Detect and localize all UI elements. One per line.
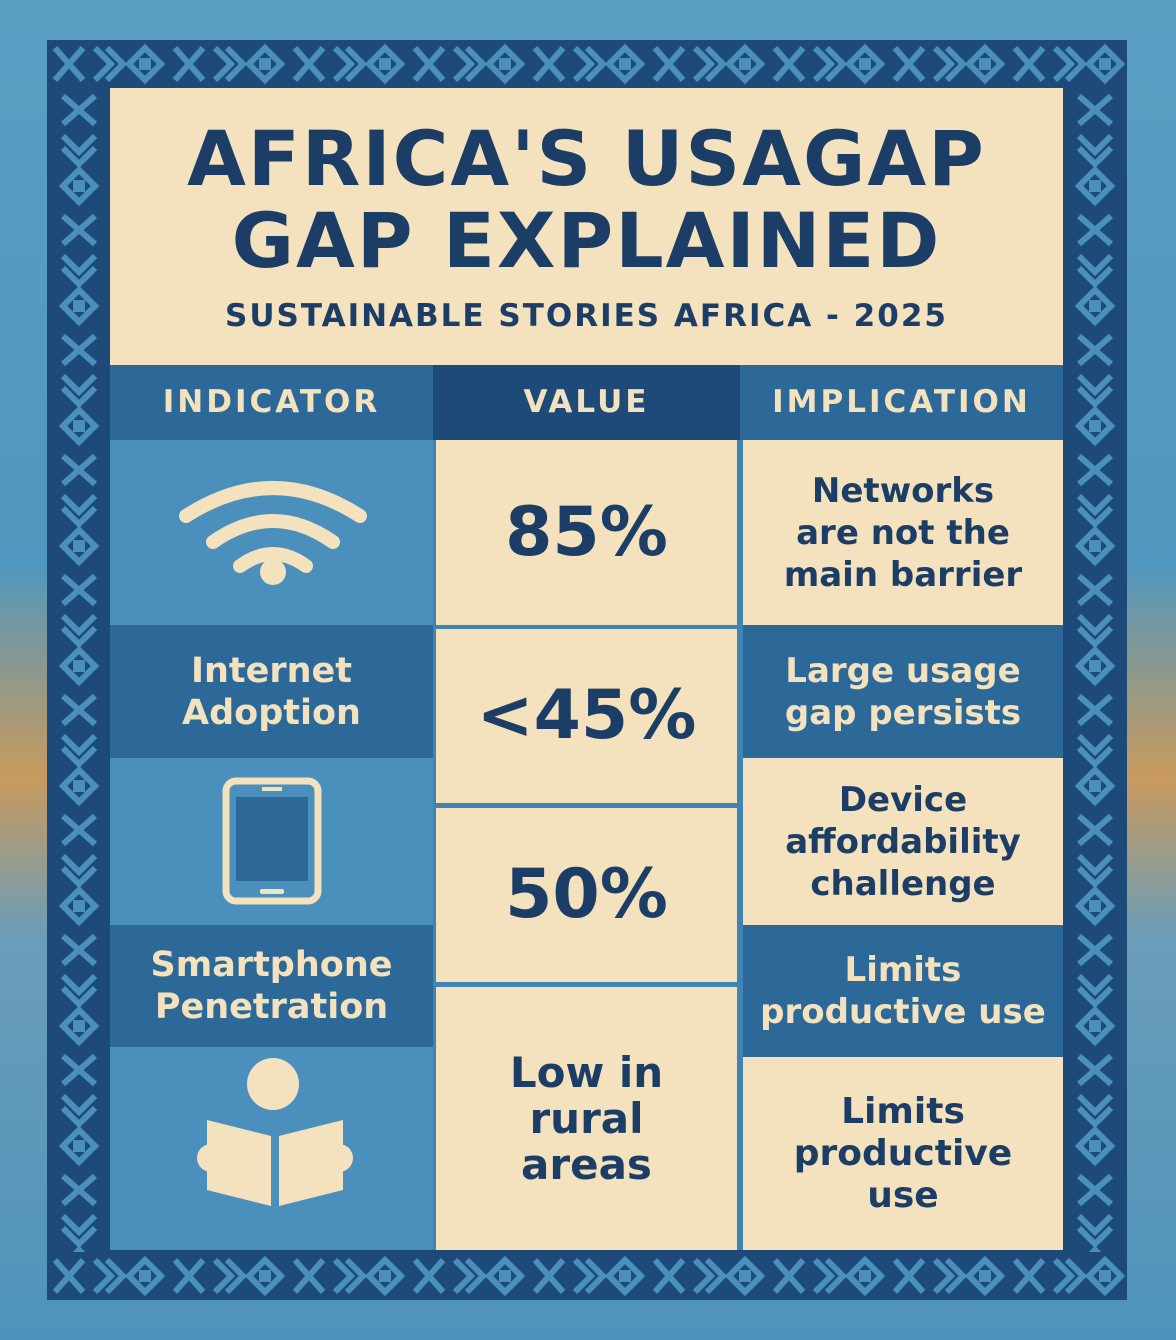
value 85%: 85% xyxy=(505,493,668,572)
implication column xyxy=(740,440,1063,1250)
header: indicator xyxy=(110,365,433,440)
label: smartphone penetration xyxy=(110,925,433,1047)
icon: reader xyxy=(197,1058,353,1206)
value 85% xyxy=(436,440,737,625)
label: internet adoption xyxy=(110,625,433,758)
implication: device affordability: Device xyxy=(839,780,967,820)
implication: large usage gap xyxy=(743,625,1063,758)
value 50% xyxy=(436,808,737,982)
value <45% xyxy=(436,629,737,803)
value low in rural areas: areas xyxy=(521,1140,652,1188)
implication: limits productive use 2: productive xyxy=(794,1132,1012,1174)
title xyxy=(187,114,986,285)
value low in rural areas: rural xyxy=(529,1094,644,1142)
header: indicator: INDICATOR xyxy=(163,384,380,420)
indicator column xyxy=(110,440,433,1250)
implication: networks xyxy=(743,440,1063,625)
header: implication: IMPLICATION xyxy=(772,384,1031,420)
implication: limits productive use 2: Limits xyxy=(841,1090,965,1132)
header: implication xyxy=(740,365,1063,440)
implication: limits productive use 2: use xyxy=(867,1174,939,1216)
implication: limits productive use: Limits xyxy=(845,950,961,990)
implication: large usage gap: Large usage xyxy=(785,650,1021,690)
value column xyxy=(433,440,740,1250)
label: smartphone penetration: Smartphone xyxy=(151,945,392,985)
title: GAP EXPLAINED xyxy=(232,196,941,285)
header: value xyxy=(433,365,740,440)
implication: device affordability xyxy=(743,758,1063,925)
label: internet adoption: Adoption xyxy=(182,692,361,732)
implication: networks: main barrier xyxy=(784,554,1022,594)
value low in rural areas xyxy=(436,987,737,1250)
icon: wifi xyxy=(179,480,367,585)
implication: networks: Networks xyxy=(812,470,994,510)
implication: device affordability: challenge xyxy=(810,864,996,904)
header panel xyxy=(110,88,1063,365)
value 50%: 50% xyxy=(505,855,668,934)
label: smartphone penetration: Penetration xyxy=(155,987,388,1027)
label: internet adoption: Internet xyxy=(191,650,352,690)
icon: smartphone xyxy=(222,778,322,904)
implication: device affordability: affordability xyxy=(785,822,1021,862)
table header xyxy=(110,365,1063,440)
value low in rural areas: Low in xyxy=(510,1048,663,1096)
implication: networks: are not the xyxy=(796,512,1010,552)
subtitle: SUSTAINABLE STORIES AFRICA - 2025 xyxy=(225,298,948,334)
implication: limits productive use: productive use xyxy=(760,992,1046,1032)
title: AFRICA'S USAGAP xyxy=(187,114,986,203)
implication: limits productive use 2 xyxy=(743,1057,1063,1250)
header: value: VALUE xyxy=(524,384,649,420)
value <45%: <45% xyxy=(477,676,696,755)
implication: large usage gap: gap persists xyxy=(785,692,1021,732)
implication: limits productive use xyxy=(743,925,1063,1057)
